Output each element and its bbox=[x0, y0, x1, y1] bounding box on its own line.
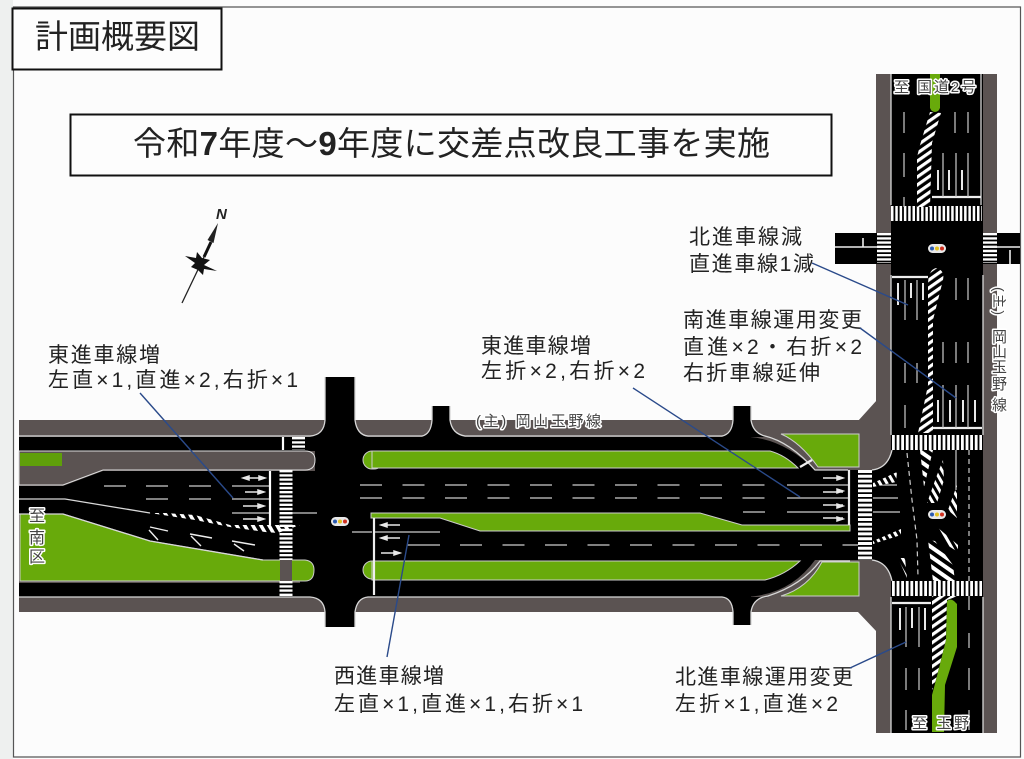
south of north intersection markings bbox=[898, 268, 975, 433]
south arm markings bbox=[900, 596, 969, 732]
road label: north-south route: 岡 bbox=[992, 329, 1007, 346]
callout: eastbound lane increase west: 東進車線増 bbox=[48, 344, 160, 367]
callout: westbound lane increase: 左直×1,直進×1,右折×1 bbox=[334, 693, 583, 716]
arrows west approach bbox=[243, 476, 265, 521]
road label: north-south route: (主) bbox=[991, 287, 1007, 315]
arrows central bbox=[381, 476, 843, 555]
callout: northbound operation change bbox=[675, 642, 906, 716]
north-south road shoulders bbox=[876, 74, 997, 733]
road label: to Minami-ku: 区 bbox=[29, 549, 45, 566]
left approach median bbox=[19, 451, 315, 485]
hatched island west approach bbox=[150, 513, 300, 533]
road label: north-south route: 野 bbox=[992, 376, 1007, 393]
callout: northbound lane decrease bbox=[689, 226, 908, 305]
callout: northbound operation change: 北進車線運用変更 bbox=[675, 666, 853, 689]
road label: north-south route: 山 bbox=[992, 344, 1007, 361]
lane markings west approach bbox=[104, 437, 317, 551]
callout: southbound operation change bbox=[683, 309, 956, 398]
road label: north-south route: 玉 bbox=[992, 359, 1007, 376]
heading banner: 令和7年度～9年度に交差点改良工事を実施 bbox=[133, 125, 770, 162]
callout: southbound operation change: 南進車線運用変更 bbox=[683, 309, 862, 332]
crosswalks bbox=[286, 214, 990, 596]
callout: eastbound lane increase centre: 東進車線増 bbox=[481, 335, 591, 358]
callout: northbound operation change: 左折×1,直進×2 bbox=[675, 693, 838, 716]
heading banner bbox=[70, 114, 832, 176]
intersection markings south junction bbox=[873, 450, 969, 581]
north arm markings bbox=[835, 74, 1020, 264]
callout: southbound operation change: 直進×2・右折×2 bbox=[683, 336, 862, 359]
road label: north-south route: 線 bbox=[992, 397, 1007, 414]
callout: eastbound lane increase centre: 左折×2,右折×2 bbox=[481, 360, 645, 383]
road label: to Tamano: 至 玉野 bbox=[912, 715, 969, 732]
lane markings central east-west bbox=[352, 485, 900, 545]
title bbox=[12, 8, 222, 70]
stop lines bbox=[374, 197, 982, 603]
road label: to Minami-ku: 至 bbox=[29, 508, 45, 525]
road label: to Minami-ku: 南 bbox=[29, 529, 45, 547]
traffic signals bbox=[331, 244, 946, 526]
icon: north compass bbox=[182, 206, 228, 303]
callout: westbound lane increase bbox=[334, 535, 583, 716]
road label: east-west route: (主) 岡山玉野線 bbox=[476, 413, 601, 430]
callout: northbound lane decrease: 北進車線減 bbox=[689, 226, 802, 249]
icon: north compass: N bbox=[216, 206, 228, 223]
callout: northbound lane decrease: 直進車線1減 bbox=[689, 253, 814, 276]
title: 計画概要図 bbox=[35, 18, 200, 55]
road label: north-south route bbox=[991, 287, 1007, 414]
callout: eastbound lane increase west bbox=[48, 344, 298, 498]
callout: southbound operation change: 右折車線延伸 bbox=[683, 362, 820, 385]
callout: eastbound lane increase west: 左直×1,直進×2,右折×1 bbox=[48, 369, 298, 392]
road label: to Route 2: 至 国道2号 bbox=[894, 79, 976, 96]
callout: westbound lane increase: 西進車線増 bbox=[334, 665, 444, 688]
road label: to Minami-ku bbox=[29, 508, 45, 566]
green medians bbox=[20, 434, 859, 596]
east-west road shoulders bbox=[19, 400, 879, 632]
callout: eastbound lane increase centre bbox=[481, 335, 800, 497]
